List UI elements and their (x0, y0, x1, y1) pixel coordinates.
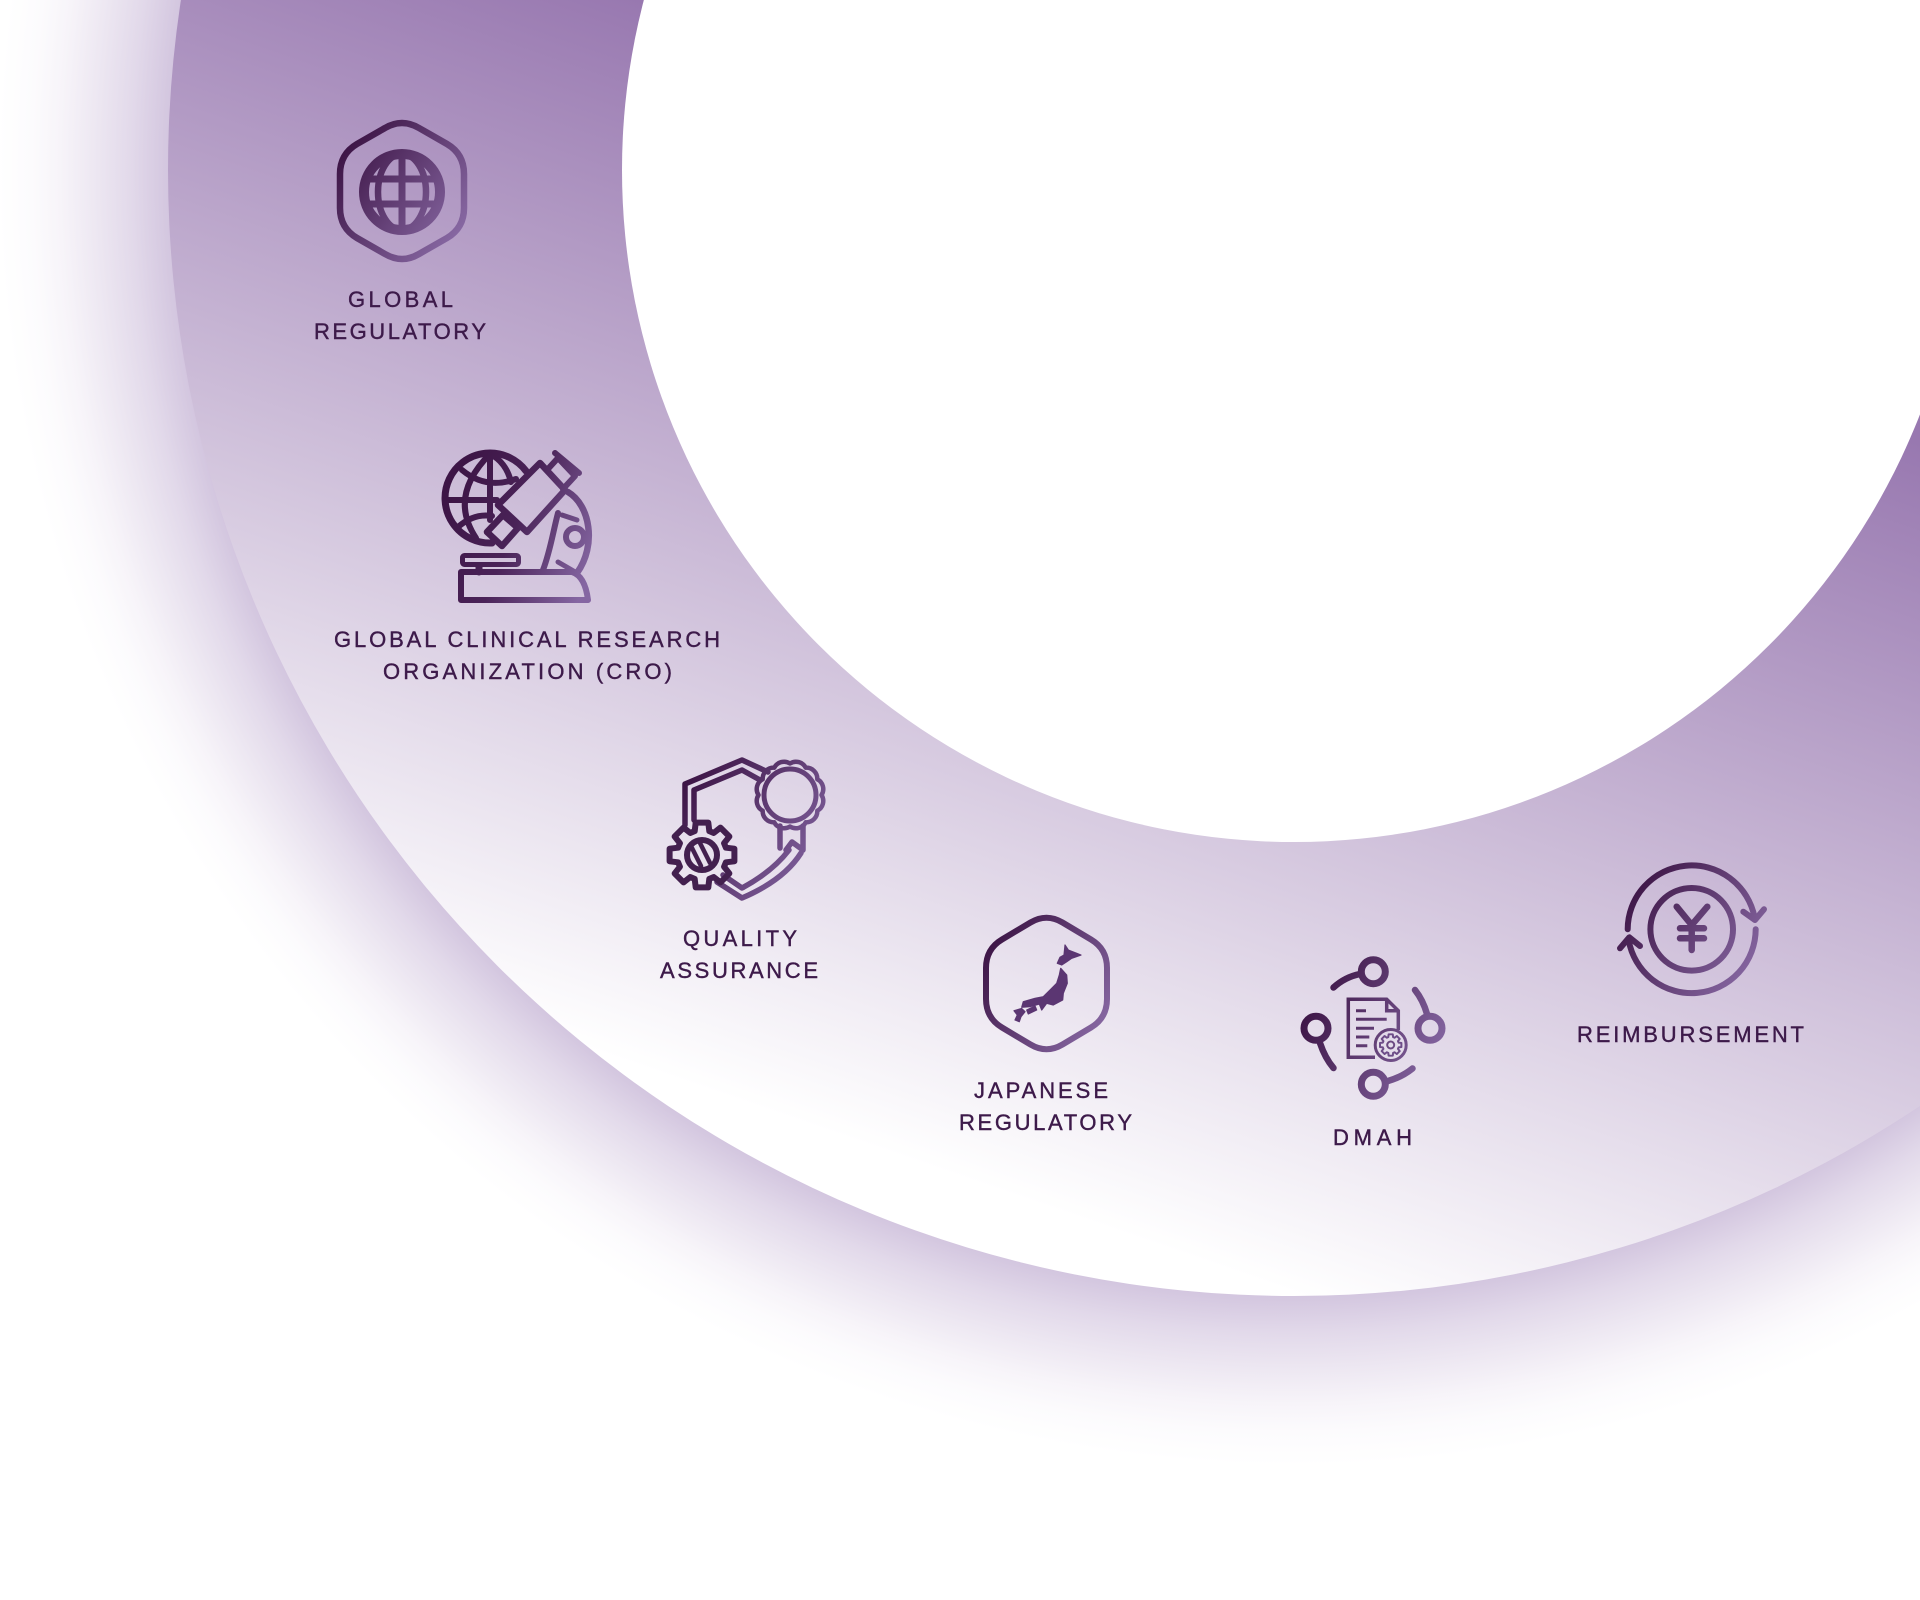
icon: map of Japan in hexagon (986, 918, 1107, 1049)
icon: shield, gear and rosette (685, 760, 823, 898)
item: global regulatory (314, 123, 486, 344)
heading: quality assurance (660, 926, 818, 983)
heading: reimbursement: REIMBURSEMENT (1577, 1022, 1804, 1047)
icon: document with gear and four rings (1304, 960, 1442, 1096)
item: reimbursement (1577, 865, 1804, 1047)
icon: small document gear (1380, 1034, 1401, 1056)
item: quality assurance (660, 760, 823, 983)
icon: globe and microscope (445, 453, 589, 600)
item: japanese regulatory (959, 918, 1132, 1135)
heading: global clinical research organization (334, 627, 720, 684)
heading: quality assurance: ASSURANCE (660, 958, 818, 983)
heading: japanese regulatory: REGULATORY (959, 1110, 1132, 1135)
icon: globe in hexagon (340, 123, 464, 259)
heading: global regulatory: GLOBAL (348, 287, 453, 312)
heading: global regulatory: REGULATORY (314, 319, 486, 344)
heading: DMAH: DMAH (1333, 1125, 1412, 1150)
heading: global clinical research organization: ORGANIZATION (CRO) (383, 659, 672, 684)
icon: yen coin with circular arrows (1620, 865, 1764, 993)
heading: japanese regulatory: JAPANESE (974, 1078, 1108, 1103)
item: global clinical research organization (334, 453, 720, 684)
heading: japanese regulatory (959, 1078, 1132, 1135)
item: DMAH (1304, 960, 1442, 1150)
heading: quality assurance: QUALITY (683, 926, 797, 951)
panel: purple gradient ring (168, 0, 1920, 1296)
icon: quality gear (670, 823, 734, 887)
heading: global clinical research organization: GLOBAL CLINICAL RESEARCH (334, 627, 720, 652)
heading: global regulatory (314, 287, 486, 344)
